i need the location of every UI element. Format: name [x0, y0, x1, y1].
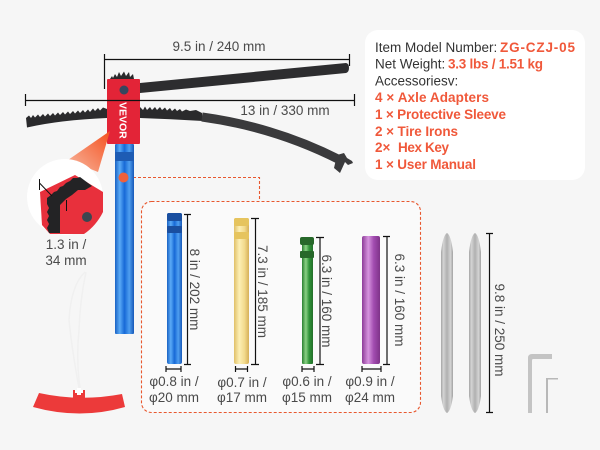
info panel: model, weight and accessories: 3.3 lbs / 1.51 kg — [448, 56, 543, 72]
adapter: yellow: φ17 mm — [217, 390, 267, 405]
info panel: model, weight and accessories: Accessoriesv: — [375, 74, 458, 88]
info panel: model, weight and accessories — [365, 30, 585, 180]
adapter: yellow: 7.3 in / 185 mm — [255, 245, 270, 338]
main tool: red VEVOR block — [107, 79, 140, 144]
dimension: rack height line 9.5 in: 9.5 in / 240 mm — [172, 39, 266, 54]
info panel: model, weight and accessories: 2 × Tire Irons — [375, 124, 458, 139]
adapter: green: 6.3 in / 160 mm — [319, 254, 334, 348]
tire irons: 9.8 in / 250 mm — [492, 283, 507, 377]
info panel: model, weight and accessories: 2× — [375, 140, 391, 155]
adapter: blue: φ0.8 in / — [149, 374, 199, 389]
protective sleeve — [33, 272, 125, 414]
dimension: rack height line 9.5 in — [104, 39, 350, 89]
adapter: blue: φ20 mm — [149, 390, 199, 405]
callout: tooth detail — [27, 131, 110, 268]
tire irons — [441, 233, 507, 413]
info panel: model, weight and accessories: 4 × Axle Adapters — [375, 90, 489, 105]
info panel: model, weight and accessories: Item Model Number: — [375, 40, 497, 55]
info panel: model, weight and accessories: Net Weight: — [375, 56, 445, 72]
info panel: model, weight and accessories: 1 × Protective Sleeve — [375, 107, 506, 122]
dashed panel: axle adapters — [142, 202, 420, 412]
hex keys — [528, 354, 558, 413]
adapter: purple: φ0.9 in / — [345, 374, 395, 389]
adapter: green: φ15 mm — [282, 390, 332, 405]
main tool: blue shaft — [115, 144, 134, 334]
adapter: yellow: φ0.7 in / — [217, 375, 267, 390]
main tool: curved lower handle with fork — [202, 117, 353, 173]
adapter: green — [282, 237, 334, 405]
adapter: purple: 6.3 in / 160 mm — [392, 253, 407, 347]
info panel: model, weight and accessories: Hex Key — [398, 140, 449, 155]
main tool: toothed rack — [26, 72, 203, 128]
adapter: yellow — [217, 218, 270, 405]
callout: tooth detail: 1.3 in / — [46, 237, 87, 252]
main tool: upper handle — [140, 63, 349, 93]
adapter: purple: φ24 mm — [345, 390, 395, 405]
adapter: blue — [149, 213, 202, 405]
adapter: purple — [345, 236, 407, 405]
dimension: total length 13 in — [26, 94, 354, 118]
main tool: red VEVOR block: VEVOR — [116, 102, 128, 139]
callout: tooth detail: 34 mm — [45, 253, 87, 268]
dimension: total length 13 in: 13 in / 330 mm — [240, 103, 330, 118]
dashed connector — [128, 178, 260, 201]
info panel: model, weight and accessories: ZG-CZJ-05 — [500, 40, 575, 55]
adapter: blue: 8 in / 202 mm — [187, 249, 202, 330]
info panel: model, weight and accessories: 1 × User Manual — [375, 157, 476, 172]
adapter: green: φ0.6 in / — [282, 374, 332, 389]
